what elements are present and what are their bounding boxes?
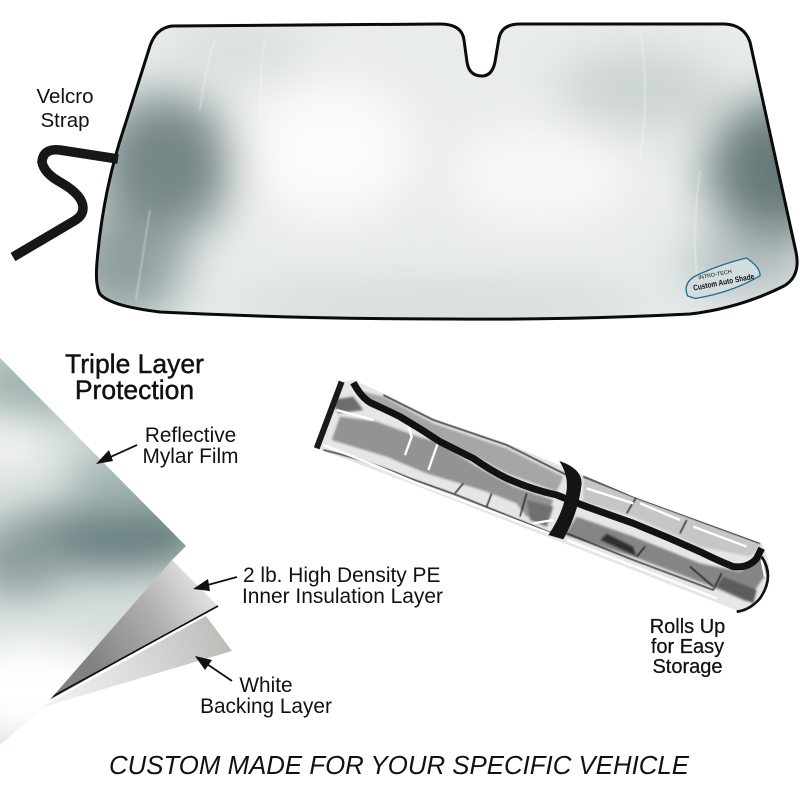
backing layer label: Backing Layer — [200, 695, 332, 718]
reflective mylar film label: Mylar Film — [143, 445, 238, 468]
arrow: backing layer — [195, 656, 232, 681]
reflective mylar film label: Reflective — [145, 424, 236, 447]
rolls up label — [650, 616, 725, 678]
brand logo — [682, 256, 762, 300]
insulation layer label: 2 lb. High Density PE — [243, 564, 440, 587]
brand logo: Custom Auto Shade — [692, 272, 755, 293]
velcro strap — [13, 150, 118, 257]
rolls up label: Rolls Up — [650, 616, 725, 638]
velcro strap label: Strap — [40, 109, 90, 132]
inner insulation layer — [46, 560, 218, 702]
zipper edge — [353, 383, 762, 567]
backing layer label: White — [239, 674, 293, 697]
velcro strap label — [37, 85, 93, 132]
backing edge line — [5, 708, 40, 740]
rolled up shade — [314, 380, 770, 613]
brand logo: INTRO-TECH — [698, 269, 732, 281]
arrow: insulation layer — [193, 577, 237, 591]
windshield sun shade — [65, 15, 800, 325]
reflective mylar film — [0, 358, 186, 745]
velcro band — [548, 461, 582, 539]
insulation layer label — [242, 564, 443, 608]
separator line — [48, 606, 218, 699]
rolls up label: Storage — [652, 656, 723, 678]
insulation layer label: Inner Insulation Layer — [242, 585, 443, 608]
triple layer heading: Triple Layer — [65, 349, 204, 379]
backing layer label — [200, 674, 332, 718]
reflective mylar film label — [143, 424, 238, 468]
tagline: CUSTOM MADE FOR YOUR SPECIFIC VEHICLE — [109, 752, 690, 780]
triple layer heading — [65, 349, 204, 405]
layered material sample — [0, 350, 232, 750]
white backing layer — [40, 616, 232, 708]
velcro strap label: Velcro — [37, 85, 93, 108]
rolls up label: for Easy — [651, 636, 724, 658]
arrow: reflective mylar film — [96, 445, 137, 464]
end cap — [317, 382, 342, 448]
triple layer heading: Protection — [75, 375, 194, 405]
